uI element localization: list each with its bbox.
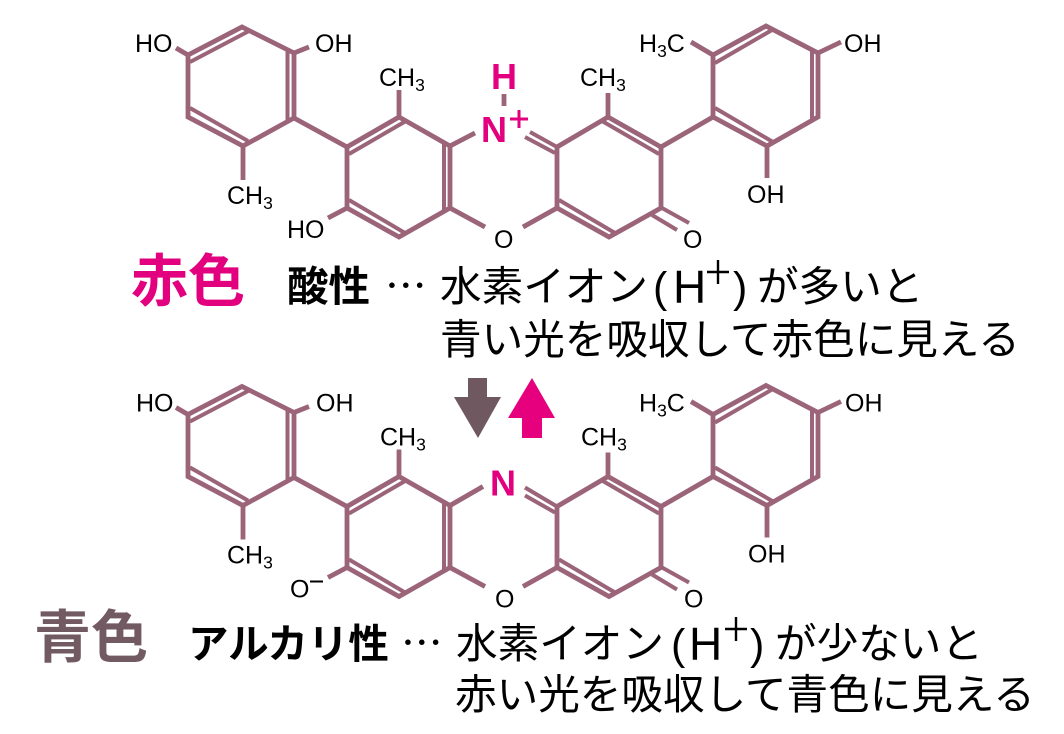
text block: alkaline explanation: が少ないと <box>775 620 983 667</box>
labels: HO <box>287 216 324 244</box>
right phenol ring <box>713 386 818 506</box>
labels: CH <box>227 182 263 210</box>
label: acidic: 酸性 <box>287 263 370 310</box>
labels: 3 <box>416 434 426 454</box>
labels: O <box>683 226 702 254</box>
labels: OH <box>315 30 352 58</box>
labels: CH <box>227 542 263 570</box>
labels: O <box>494 226 513 254</box>
labels: HO <box>135 30 172 58</box>
substituent bonds <box>176 402 841 590</box>
heading: red colour: 赤色 <box>131 250 245 314</box>
substituent bonds <box>176 42 841 230</box>
text block: alkaline explanation: ( <box>671 621 686 669</box>
labels: O <box>495 586 514 614</box>
text block: acidic explanation: ( <box>653 264 668 312</box>
labels: 3 <box>415 75 425 95</box>
text block: alkaline explanation: H <box>689 618 722 670</box>
labels: OH <box>748 540 786 568</box>
labels: O <box>684 586 703 614</box>
text block: acidic explanation <box>385 253 1020 363</box>
labels: 3 <box>616 75 626 95</box>
text block: alkaline explanation: 赤い光を吸収して青色に見える <box>455 671 1035 718</box>
labels: C <box>667 390 685 418</box>
labels: H <box>639 30 657 58</box>
text block: acidic explanation: 青い光を吸収して赤色に見える <box>440 316 1020 363</box>
text block: acidic explanation: が多いと <box>757 263 923 310</box>
central fused rings <box>347 476 661 596</box>
labels: CH <box>580 64 616 92</box>
labels: CH <box>379 64 415 92</box>
arrow: toward alkaline <box>454 378 501 438</box>
labels <box>136 390 882 614</box>
text block: acidic explanation: ) <box>733 264 747 312</box>
right phenol ring <box>713 26 818 146</box>
labels: O <box>290 576 309 604</box>
labels: CH <box>581 424 617 452</box>
text block: acidic explanation: 水素イオン <box>440 263 648 310</box>
text block: alkaline explanation <box>401 610 1035 718</box>
molecule: alkaline form (blue) <box>136 386 882 614</box>
labels: 3 <box>657 41 667 61</box>
labels: CH <box>380 424 416 452</box>
protonated nitrogen: H <box>491 56 517 97</box>
left phenol ring <box>188 386 294 506</box>
text block: alkaline explanation: … <box>401 610 443 670</box>
text block: alkaline explanation: 水素イオン <box>456 620 664 667</box>
labels: HO <box>136 390 174 418</box>
central fused rings <box>347 117 661 237</box>
protonated nitrogen: N <box>481 109 507 150</box>
molecule: acidic form (red) <box>135 26 882 254</box>
protonated nitrogen <box>481 56 528 150</box>
heading: blue colour: 青色 <box>34 606 148 670</box>
labels: OH <box>845 390 882 418</box>
labels: 3 <box>263 552 273 572</box>
arrow: toward acidic <box>508 378 555 438</box>
labels: 3 <box>657 400 667 420</box>
text block: acidic explanation: H <box>673 261 706 313</box>
labels: OH <box>316 390 354 418</box>
labels <box>135 30 882 254</box>
label: alkaline: アルカリ性 <box>188 621 389 667</box>
labels: OH <box>747 181 784 209</box>
text block: acidic explanation: … <box>385 253 427 313</box>
labels: OH <box>844 30 882 58</box>
nitrogen: N <box>490 462 516 504</box>
labels: 3 <box>263 193 273 213</box>
labels: H <box>639 390 657 418</box>
labels: 3 <box>617 434 627 454</box>
labels: C <box>667 30 685 58</box>
text block: alkaline explanation: ) <box>750 621 764 669</box>
left phenol ring <box>188 27 294 146</box>
